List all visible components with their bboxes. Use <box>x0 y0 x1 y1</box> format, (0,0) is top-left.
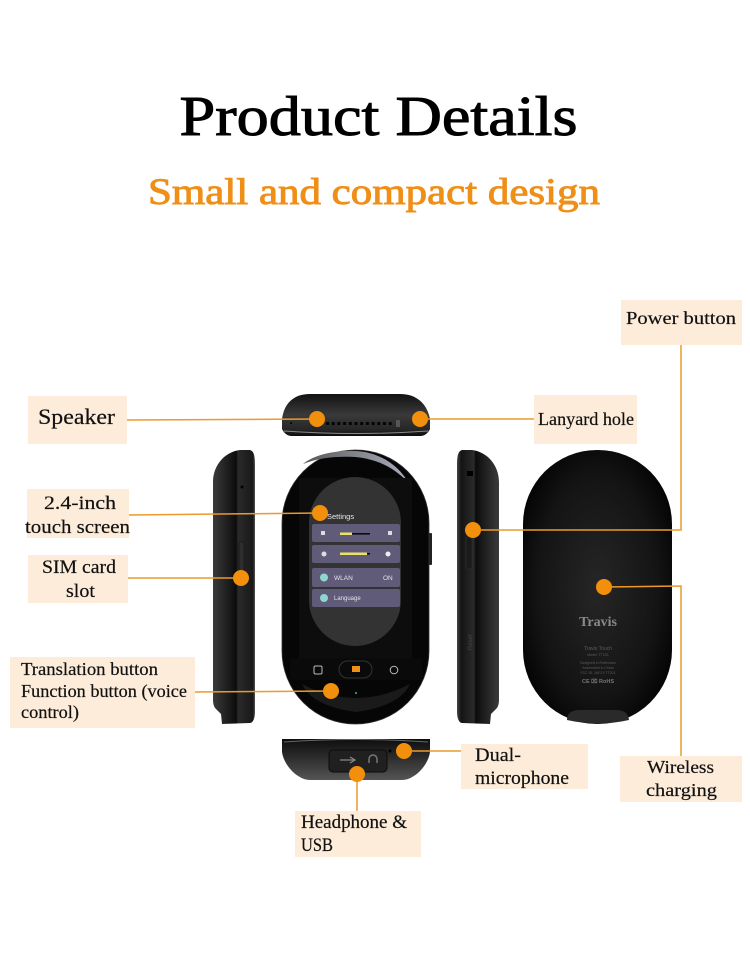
WLAN row: ON <box>383 575 393 582</box>
label: wireless charging: Wireless <box>647 757 714 777</box>
label: headphone and USB: USB <box>301 835 333 856</box>
subtitle: Small and compact design <box>148 172 600 213</box>
volume row <box>312 524 400 542</box>
navigation bar <box>290 658 422 680</box>
label: headphone and USB <box>295 811 421 857</box>
label: speaker <box>28 396 127 444</box>
brightness row <box>312 545 400 563</box>
WLAN row <box>312 568 400 587</box>
brand name: Travis <box>579 615 617 630</box>
label: headphone and USB: Headphone & <box>301 812 407 833</box>
language row <box>312 589 400 607</box>
label: lanyard hole: Lanyard hole <box>538 409 634 429</box>
label: touch screen: 2.4-inch <box>44 493 117 514</box>
label: touch screen: touch screen <box>25 517 131 538</box>
device: front view with settings screen <box>282 450 432 724</box>
device: bottom edge view <box>282 739 430 780</box>
label: SIM card slot: slot <box>66 581 96 602</box>
label: touch screen <box>25 489 131 538</box>
connector lines <box>127 345 681 811</box>
device: back view <box>523 450 672 724</box>
label: dual microphone: microphone <box>475 768 569 789</box>
fine print: FCC ID: 2AFJY-TT201 <box>580 671 616 675</box>
title: Product Details <box>180 86 578 148</box>
label: power button <box>621 300 742 345</box>
label: lanyard hole <box>534 395 637 444</box>
label: wireless charging <box>620 756 742 802</box>
label: translation and function buttons <box>10 657 195 728</box>
screen heading: Settings <box>327 512 354 521</box>
device: right side view: Reset <box>468 634 474 650</box>
label: speaker: Speaker <box>38 404 116 429</box>
label: SIM card slot <box>28 555 128 603</box>
WLAN row: WLAN <box>334 575 353 582</box>
label: SIM card slot: SIM card <box>42 557 117 578</box>
device: left side view <box>213 450 255 724</box>
fine print: Designed in Rotterdam <box>580 661 616 665</box>
fine print: Model: TT201 <box>587 653 609 657</box>
label: translation and function buttons: Translation button <box>21 659 158 679</box>
fine print: Assembled in China <box>582 666 614 670</box>
fine print <box>580 646 616 685</box>
label: wireless charging: charging <box>646 780 717 800</box>
label: power button: Power button <box>626 308 736 328</box>
marker dots <box>233 411 612 782</box>
device: right side view <box>457 450 499 724</box>
label: dual microphone: Dual- <box>475 745 521 766</box>
fine print: Travis Touch <box>584 646 612 652</box>
label: translation and function buttons: control) <box>21 702 79 722</box>
fine print: CE ⌧ RoHS <box>582 678 614 685</box>
label: dual microphone <box>461 744 588 789</box>
device: top edge view <box>282 394 430 436</box>
label: translation and function buttons: Function button (voice <box>21 681 187 701</box>
language row: Language <box>334 596 361 602</box>
